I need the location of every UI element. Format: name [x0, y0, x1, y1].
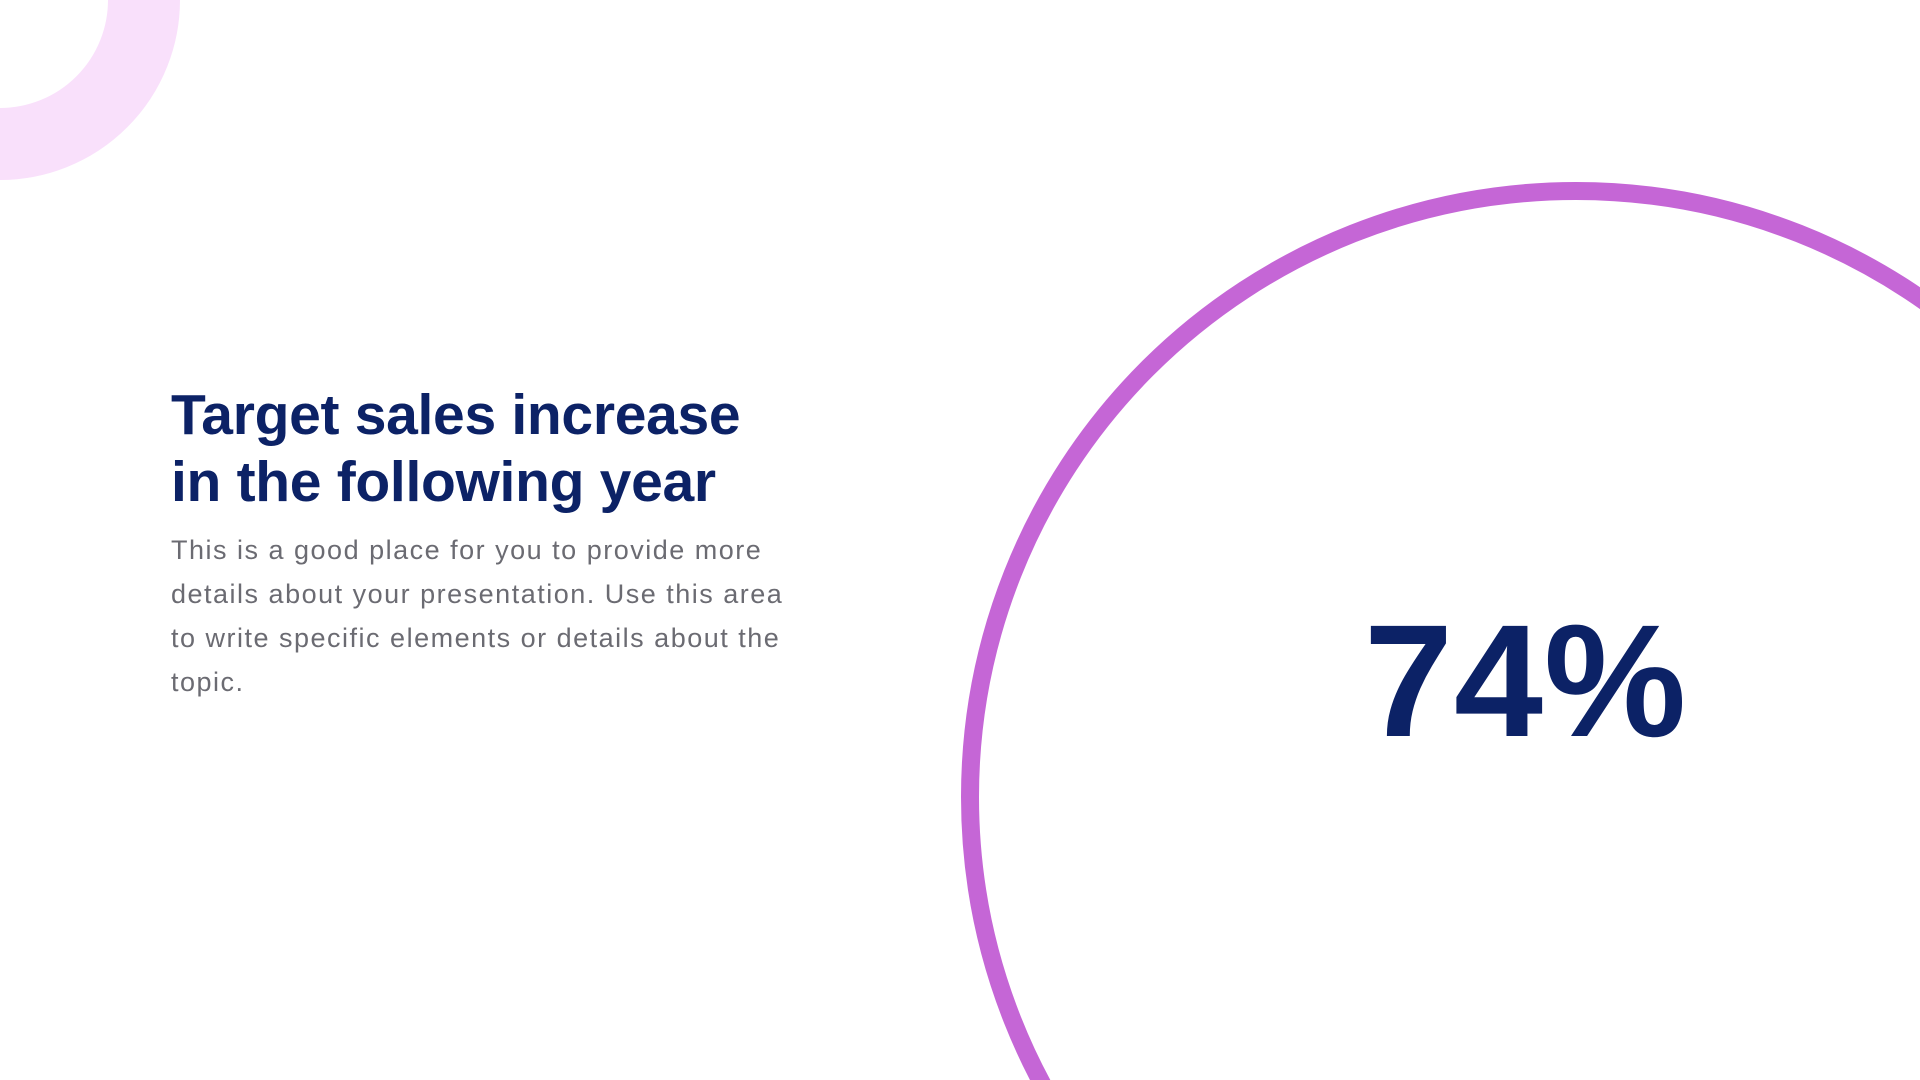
body text: details about your presentation. Use this area	[171, 579, 783, 609]
body text: to write specific elements or details about the	[171, 623, 780, 653]
body text: This is a good place for you to provide more	[171, 535, 762, 565]
title	[171, 383, 740, 514]
body text	[171, 535, 783, 697]
body text: topic.	[171, 667, 245, 697]
decorative ring: top-left	[0, 0, 180, 180]
title: in the following year	[171, 450, 716, 514]
title: Target sales increase	[171, 383, 740, 447]
stat: 74%: 74%	[1364, 591, 1687, 770]
